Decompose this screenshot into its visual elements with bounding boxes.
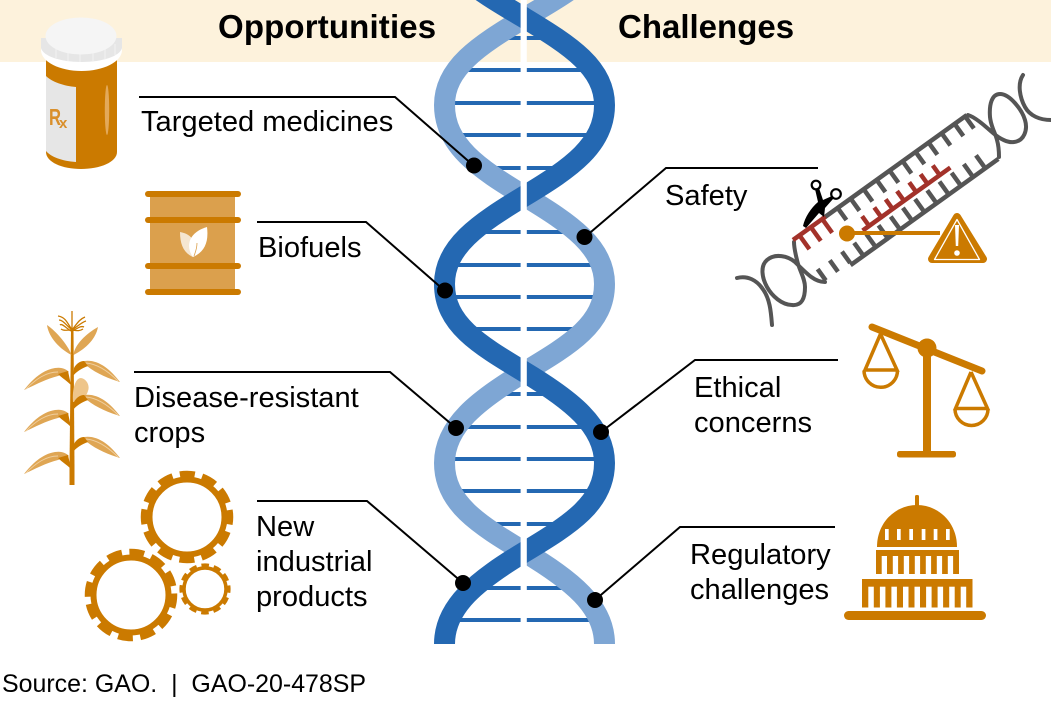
pointer dot (839, 226, 855, 242)
label: Ethical concerns: Ethical (694, 372, 781, 404)
large gear, left (88, 552, 174, 638)
heading: Opportunities: Opportunities (218, 8, 436, 45)
centre gap (521, 0, 527, 650)
left leaf 1 (24, 368, 71, 390)
label: Disease-resistant crops: crops (134, 417, 205, 449)
icon: biofuel barrel (145, 191, 241, 295)
rungs (450, 36, 598, 622)
large gear, top (144, 474, 230, 560)
right leaf 2 (73, 395, 120, 416)
icon: capitol building (844, 495, 986, 620)
tassel (58, 311, 86, 331)
left pan (864, 334, 898, 387)
tube (793, 115, 998, 284)
leader line: New industrial products (257, 501, 463, 583)
right leaf 3 (73, 437, 120, 458)
icon: prescription bottle: x (59, 115, 68, 132)
warning triangle (932, 217, 983, 260)
icon: gears (88, 474, 230, 638)
leader line: Biofuels (257, 222, 445, 291)
label: New industrial products: New (256, 511, 315, 543)
label: Targeted medicines: Targeted medicines (141, 106, 393, 138)
label: Ethical concerns: concerns (694, 407, 812, 439)
leader line: Safety (585, 168, 818, 237)
source note: Source: GAO. | GAO-20-478SP (2, 670, 366, 698)
label: Safety: Safety (665, 180, 748, 212)
label: New industrial products: industrial (256, 546, 372, 578)
leader line: Disease-resistant crops (134, 372, 456, 428)
DNA double helix (444, 0, 604, 650)
right leaf 1 (73, 361, 120, 382)
connector dots (437, 158, 609, 608)
label: New industrial products: products (256, 581, 368, 613)
label: Biofuels: Biofuels (258, 232, 362, 264)
icon: scales (864, 327, 988, 458)
light strand (444, 0, 604, 644)
dark strand (444, 0, 604, 644)
leader line: Regulatory challenges (595, 527, 835, 600)
header band (0, 0, 1051, 62)
scissors (803, 181, 841, 228)
label: Disease-resistant crops: Disease-resistant (134, 382, 359, 414)
upper leaves (47, 325, 72, 355)
stalk (70, 330, 74, 485)
icon: prescription bottle: R (49, 104, 61, 130)
left leaf 3 (24, 452, 71, 474)
heading: Challenges: Challenges (618, 8, 794, 45)
leader line: Targeted medicines (139, 97, 474, 166)
left leaf 2 (24, 410, 71, 432)
label: Regulatory challenges: Regulatory (690, 539, 831, 571)
right pan (955, 372, 988, 426)
helix ends (737, 75, 1051, 325)
cob (73, 378, 89, 402)
label: Regulatory challenges: challenges (690, 574, 829, 606)
icon: prescription bottle (41, 18, 122, 169)
icon: corn plant (24, 311, 120, 485)
warning pointer (847, 231, 940, 235)
icon: DNA gene editing (737, 75, 1051, 325)
leader line: Ethical concerns (601, 360, 838, 432)
small gear (181, 565, 229, 613)
